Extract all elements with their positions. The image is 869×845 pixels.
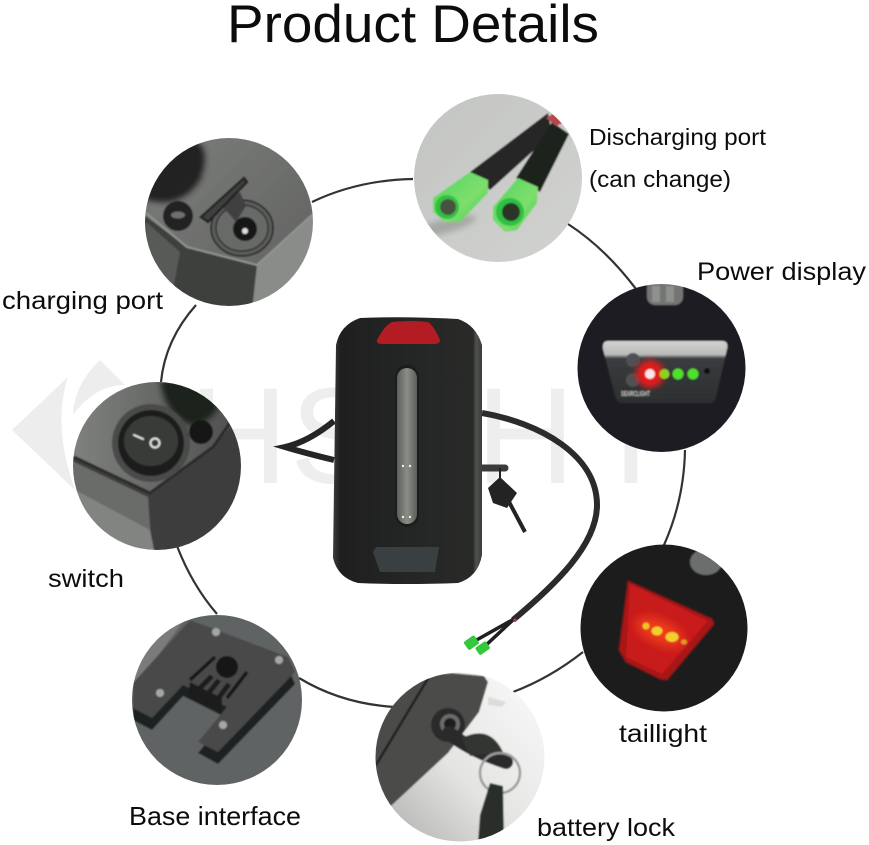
watermark: H [476, 360, 575, 513]
panel: battery lock photo [370, 670, 546, 845]
panel: power display photo: SEARCLIGHT [621, 391, 650, 398]
watermark: H [189, 360, 288, 513]
watermark [12, 360, 673, 513]
panel: switch photo [70, 378, 245, 555]
right cable [482, 413, 597, 620]
gauge window [395, 365, 419, 527]
label: power display: Power display [697, 258, 867, 286]
left cable [285, 421, 334, 460]
red lamp [377, 321, 440, 344]
connecting ring lines [161, 179, 685, 707]
label: can change: (can change) [589, 166, 731, 192]
watermark: T [589, 360, 673, 513]
battery body [333, 317, 482, 584]
display panel [373, 547, 439, 572]
key and lock stub [482, 468, 525, 532]
watermark: G [385, 360, 492, 513]
panel: taillight photo [578, 543, 750, 713]
label: base interface: Base interface [129, 801, 301, 831]
panel: discharging port photo [410, 90, 586, 266]
green cable tips [463, 618, 517, 656]
label: discharging port: Discharging port [589, 124, 767, 150]
panel: base interface photo [130, 612, 305, 787]
panel: power display photo [575, 280, 750, 454]
label: taillight: taillight [619, 720, 707, 748]
watermark: S [290, 360, 381, 513]
label: battery lock: battery lock [537, 814, 676, 842]
panel: charging port photo [145, 138, 313, 306]
label: switch: switch [48, 565, 124, 593]
battery product [285, 317, 597, 656]
label: charging port: charging port [2, 287, 163, 315]
